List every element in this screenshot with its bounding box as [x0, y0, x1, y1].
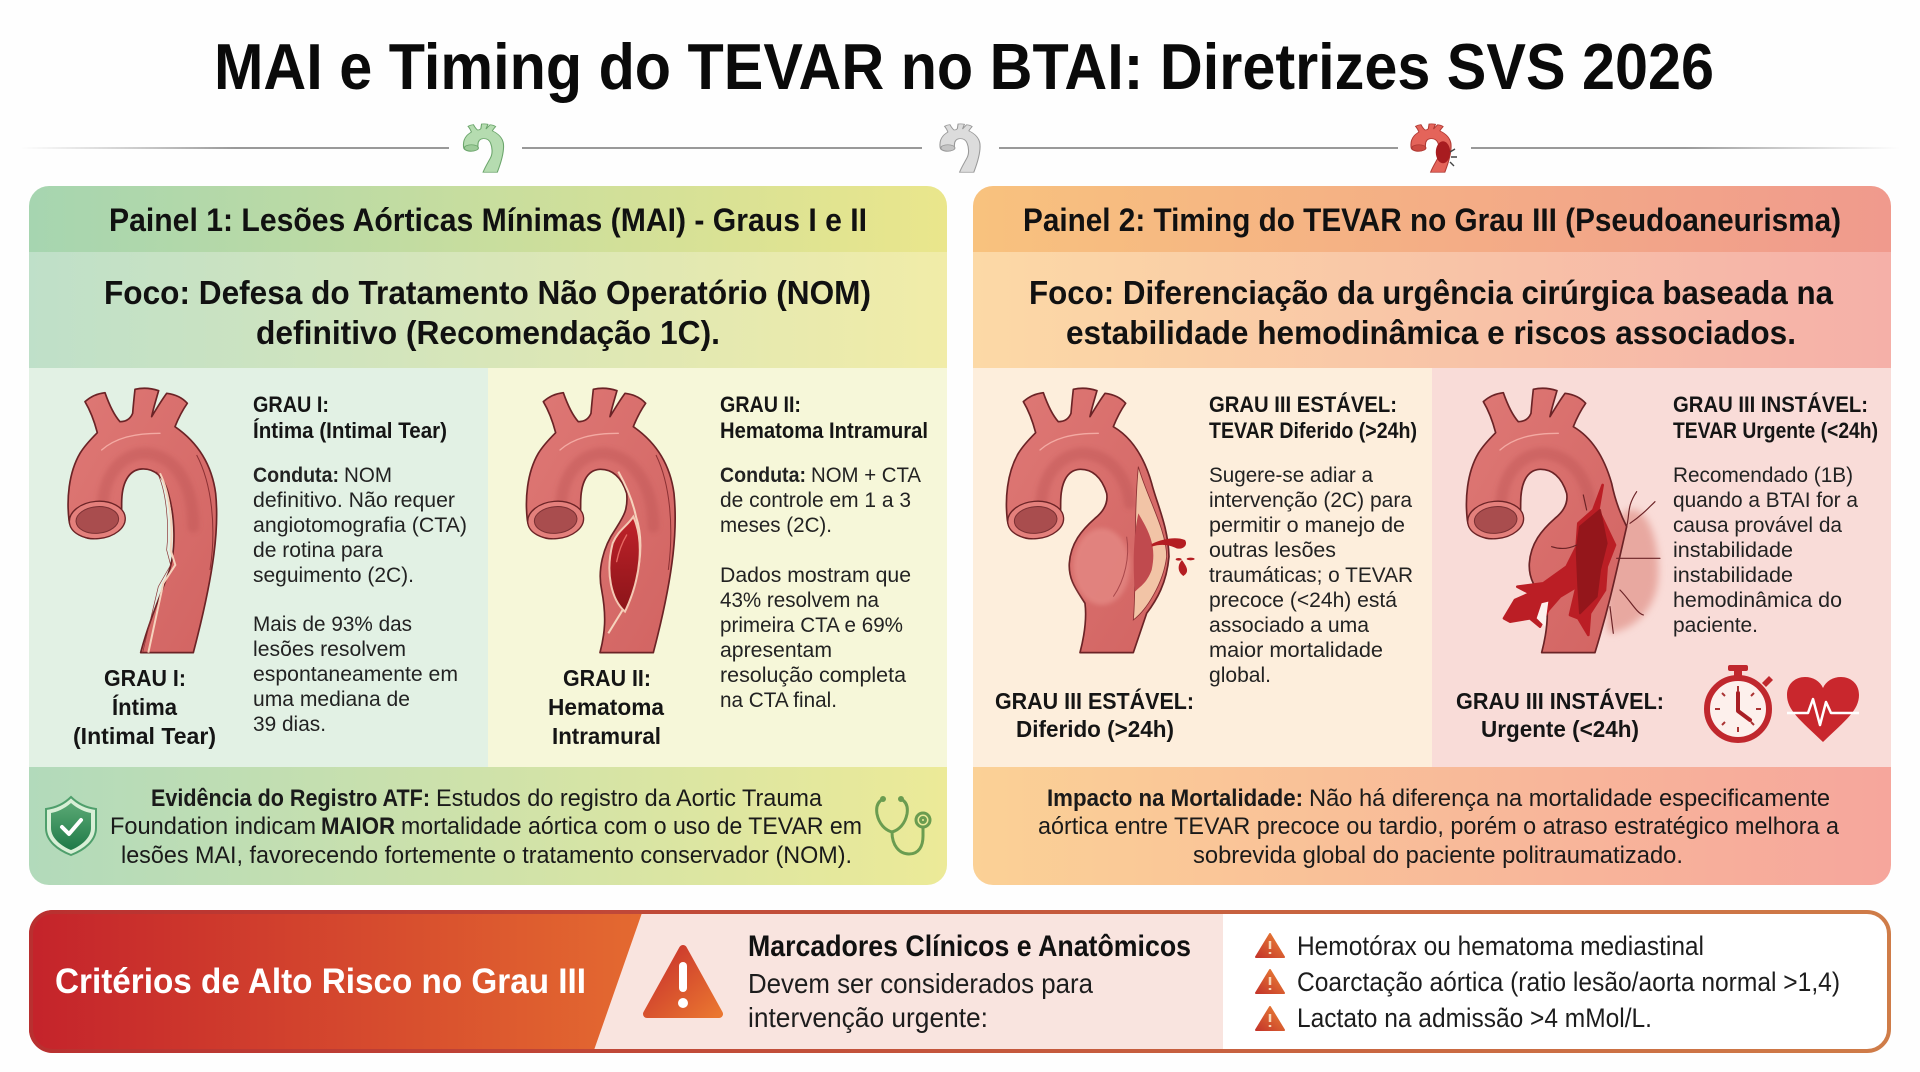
sub-panel: Grau II — [488, 368, 947, 767]
icon: shield with check — [46, 797, 96, 855]
label: Grau III stable — [995, 687, 1194, 742]
text: Grau I body: seguimento (2C). — [253, 563, 414, 587]
text: Grau II body: primeira CTA e 69% — [720, 613, 903, 637]
text: Grau II body: apresentam — [720, 638, 832, 662]
text: Grau III unstable body — [1673, 463, 1858, 637]
text: Grau I body: 39 dias. — [253, 712, 326, 736]
text: Grau I body: Conduta: — [253, 463, 339, 487]
text: Grau III stable body: global. — [1209, 663, 1271, 687]
label: Grau III stable: GRAU III ESTÁVEL: — [995, 687, 1194, 714]
panel 1 focus band — [29, 252, 947, 368]
icon: warning triangle — [647, 949, 719, 1014]
text: Grau II body: resolução completa — [720, 663, 906, 687]
text: Grau III stable body — [1209, 463, 1413, 687]
panel 1 header band — [29, 186, 947, 252]
text: Grau III stable body: traumáticas; o TEVAR — [1209, 563, 1413, 587]
text: Grau III unstable body: instabilidade — [1673, 563, 1793, 587]
sub-panel: Grau I — [29, 368, 488, 767]
text: Grau II body: NOM + CTA — [811, 463, 922, 487]
panel 2 mortality strip: sobrevida global do paciente politraumatizado. — [1193, 842, 1683, 869]
panel 2 mortality strip — [973, 767, 1891, 885]
text: Grau I heading — [254, 396, 446, 442]
illustration: aorta with contained pseudoaneurysm — [1006, 388, 1195, 653]
header divider with aorta icons — [20, 124, 1900, 172]
text: Grau II body: 43% resolvem na — [720, 588, 879, 612]
text: Grau III unstable heading: GRAU III INSTÁVEL: — [1673, 392, 1868, 417]
panel 2 mortality strip: Não há diferença na mortalidade especificamente — [1309, 785, 1830, 812]
text: Grau II heading: GRAU II: — [720, 392, 801, 417]
heading: high risk criteria: Critérios de Alto Risco no Grau III — [55, 962, 586, 1001]
text: Grau I body: angiotomografia (CTA) — [253, 513, 467, 537]
text: Grau I body: lesões resolvem — [253, 637, 406, 661]
text: Grau I body: espontaneamente em — [253, 662, 458, 686]
panel 2: TEVAR timing — [973, 186, 1891, 885]
list: risk markers — [1256, 931, 1840, 1033]
text: Grau III unstable body: instabilidade — [1673, 538, 1793, 562]
label: Grau I: GRAU I: — [104, 665, 186, 691]
text: Grau III stable body: outras lesões — [1209, 538, 1336, 562]
text: Grau III stable body: associado a uma — [1209, 613, 1369, 637]
panel 2 focus band — [973, 252, 1891, 368]
text: Grau III unstable body: quando a BTAI for a — [1673, 488, 1858, 512]
icon: stethoscope — [877, 798, 930, 854]
label: Grau III unstable — [1456, 687, 1664, 742]
bullet: lactate: Lactato na admissão >4 mMol/L. — [1297, 1003, 1652, 1033]
text: Grau III unstable heading — [1673, 392, 1878, 443]
label: Grau II: Hematoma — [548, 694, 664, 720]
label: Grau I: Íntima — [112, 693, 177, 720]
icon: stopwatch — [1707, 665, 1773, 740]
panel 2 mortality strip: Impacto na Mortalidade: — [1047, 785, 1303, 812]
panel 2 focus band: Foco: Diferenciação da urgência cirúrgica baseada na — [1029, 274, 1834, 311]
text: Grau I heading: GRAU I: — [253, 392, 329, 417]
panel 1: MAI — [29, 186, 947, 885]
panel 2 mortality strip: aórtica entre TEVAR precoce ou tardio, porém o atraso estratégico melhora a — [1038, 813, 1840, 840]
text: Grau II heading — [720, 396, 927, 438]
text: Grau III unstable body: hemodinâmica do — [1673, 588, 1842, 612]
text: Grau I body: uma mediana de — [253, 687, 410, 711]
bullet: coarctation: Coarctação aórtica (ratio lesão/aorta normal >1,4) — [1297, 967, 1840, 997]
text: clinical markers: Marcadores Clínicos e Anatômicos — [748, 930, 1191, 963]
text: clinical markers: Devem ser considerados para — [748, 968, 1093, 999]
icon: red injured aorta — [1411, 124, 1457, 172]
text: clinical markers — [748, 930, 1191, 1033]
label: Grau III stable: Diferido (>24h) — [1016, 716, 1174, 742]
text: Grau II heading: Hematoma Intramural — [720, 418, 928, 443]
text: Grau III stable body: Sugere-se adiar a — [1209, 463, 1373, 487]
text: Grau III stable heading — [1209, 392, 1417, 443]
text: Grau III stable heading: TEVAR Diferido (>24h) — [1209, 418, 1417, 443]
text: Grau I body — [253, 463, 467, 736]
text: ATF evidence: Estudos do registro da Aortic Trauma — [436, 785, 823, 812]
text: Grau I body: de rotina para — [253, 538, 383, 562]
high risk criteria bar — [29, 910, 1891, 1053]
hemorrhage — [1504, 485, 1615, 635]
text: Grau II body: na CTA final. — [720, 688, 837, 712]
text: clinical markers: intervenção urgente: — [748, 1002, 988, 1033]
illustration: ruptured aorta — [1466, 388, 1660, 653]
text: Grau III stable body: maior mortalidade — [1209, 638, 1383, 662]
panel 1 evidence strip — [29, 767, 947, 885]
label: Grau III unstable: Urgente (<24h) — [1481, 716, 1639, 742]
text: Grau I body: Mais de 93% das — [253, 612, 412, 636]
icon: heart with pulse — [1787, 677, 1859, 742]
text: Grau III stable heading: GRAU III ESTÁVEL: — [1209, 392, 1397, 417]
text: ATF evidence — [110, 785, 862, 869]
panel 2 header band: Painel 2: Timing do TEVAR no Grau III (Pseudoaneurisma) — [1023, 202, 1841, 238]
text: Grau II body: Conduta: — [720, 463, 806, 487]
label: Grau II: Intramural — [552, 723, 661, 749]
text: Grau II body: de controle em 1 a 3 — [720, 488, 911, 512]
text: ATF evidence: Evidência do Registro ATF: — [151, 785, 430, 812]
text: Grau III stable body: permitir o manejo de — [1209, 513, 1405, 537]
illustration: aorta with intimal tear — [68, 388, 217, 653]
blood spurt — [1152, 538, 1195, 576]
text: Grau II body: meses (2C). — [720, 513, 832, 537]
label: Grau II: GRAU II: — [563, 665, 651, 691]
label: Grau I: (Intimal Tear) — [73, 723, 216, 749]
text: Grau II body: Dados mostram que — [720, 563, 911, 587]
panel 1 focus band: definitivo (Recomendação 1C). — [256, 314, 720, 351]
text: ATF evidence: mortalidade aórtica com o uso de TEVAR em — [401, 813, 862, 840]
bullet: hemothorax: Hemotórax ou hematoma mediastinal — [1297, 931, 1704, 961]
text: Grau I body: NOM — [344, 463, 392, 487]
text: Grau II body — [720, 463, 922, 712]
text: ATF evidence: lesões MAI, favorecendo fortemente o tratamento conservador (NOM). — [121, 842, 852, 869]
text: Grau I body: definitivo. Não requer — [253, 488, 455, 512]
text: Grau III stable body: precoce (<24h) está — [1209, 588, 1397, 612]
text: Grau III unstable heading: TEVAR Urgente (<24h) — [1673, 418, 1878, 443]
text: Grau III unstable body: paciente. — [1673, 613, 1758, 637]
text: Grau III stable body: intervenção (2C) para — [1209, 488, 1412, 512]
icon: gray aorta — [940, 124, 980, 172]
red title block — [29, 910, 643, 1053]
panel 2 focus band: estabilidade hemodinâmica e riscos associados. — [1066, 314, 1796, 351]
illustration: aorta with intramural hematoma — [526, 388, 675, 653]
text: ATF evidence: Foundation indicam — [110, 813, 316, 840]
text: Grau I heading: Íntima (Intimal Tear) — [253, 418, 447, 443]
title: MAI e Timing do TEVAR no BTAI: Diretrizes SVS 2026 — [214, 30, 1714, 103]
sub-panel: Grau III stable — [973, 368, 1432, 767]
label: Grau II — [550, 670, 664, 744]
panel 1 header band: Painel 1: Lesões Aórticas Mínimas (MAI) - Graus I e II — [109, 202, 867, 238]
panel 1 focus band: Foco: Defesa do Tratamento Não Operatório (NOM) — [104, 274, 871, 311]
label: Grau I — [73, 665, 216, 749]
label: Grau III unstable: GRAU III INSTÁVEL: — [1456, 687, 1664, 714]
text: Grau III unstable body: causa provável da — [1673, 513, 1842, 537]
panel 2 header band — [973, 186, 1891, 252]
sub-panel: Grau III unstable — [1432, 368, 1891, 767]
icon: green aorta — [463, 124, 504, 172]
text: Grau III unstable body: Recomendado (1B) — [1673, 463, 1853, 487]
text: ATF evidence: MAIOR — [321, 813, 395, 840]
